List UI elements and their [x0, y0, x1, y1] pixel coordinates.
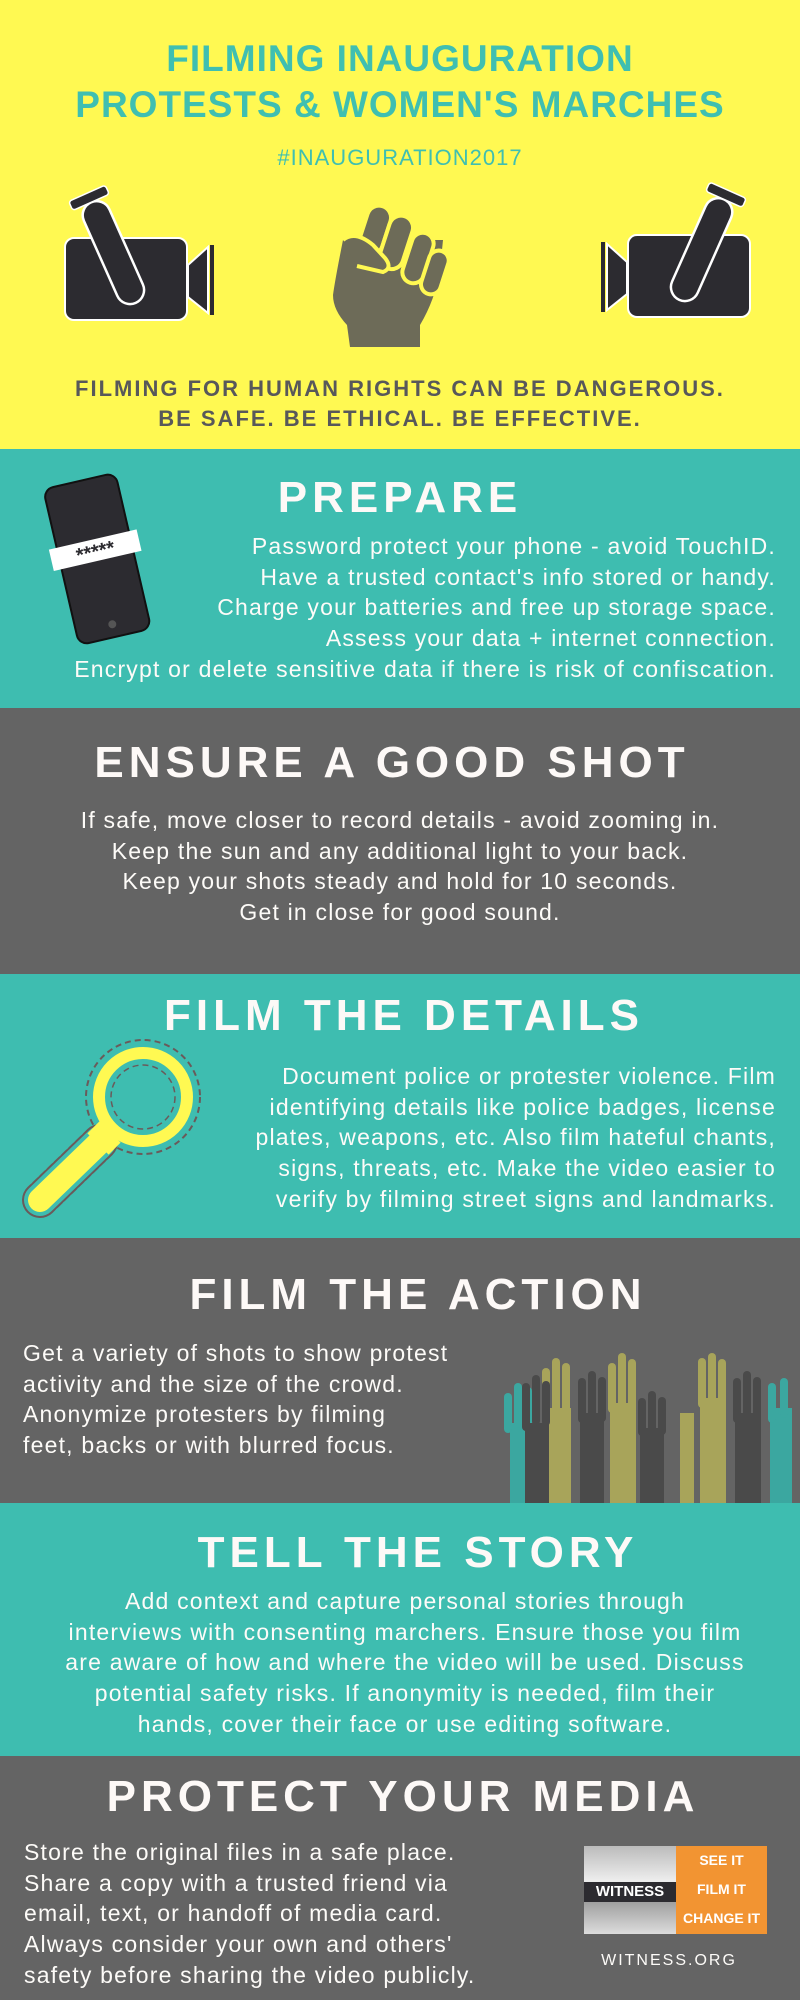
text: protect: Store the original files in a safe place.: [24, 1839, 455, 1865]
icon: raised hands: [504, 1353, 792, 1503]
panel: header: [0, 0, 800, 449]
text: action: Get a variety of shots to show protest: [23, 1340, 448, 1366]
title: FILMING INAUGURATION: [166, 38, 634, 79]
text: details: verify by filming street signs and landmarks.: [276, 1186, 776, 1212]
tagline: [75, 376, 725, 431]
text: story: interviews with consenting marchers. Ensure those you film: [69, 1619, 741, 1645]
title: PROTESTS & WOMEN'S MARCHES: [75, 84, 725, 125]
icon: raised fist: [333, 208, 447, 347]
text: ensure: [81, 807, 719, 925]
text: prepare: Charge your batteries and free up storage space.: [217, 594, 776, 620]
heading: details: FILM THE DETAILS: [164, 991, 644, 1040]
tagline: FILMING FOR HUMAN RIGHTS CAN BE DANGEROUS.: [75, 376, 725, 401]
panel: ensure a good shot: [0, 708, 800, 974]
text: details: signs, threats, etc. Make the video easier to: [278, 1155, 776, 1181]
text: prepare: Password protect your phone - avoid TouchID.: [252, 533, 776, 559]
url: WITNESS.ORG: [601, 1952, 737, 1969]
icon: phone: *****: [74, 537, 117, 567]
text: details: Document police or protester violence. Film: [282, 1063, 776, 1089]
icon: left camera: [64, 185, 214, 321]
text: protect: safety before sharing the video publicly.: [24, 1962, 476, 1988]
logo: witness: FILM IT: [697, 1881, 746, 1897]
text: action: feet, backs or with blurred focus.: [23, 1432, 395, 1458]
logo: witness: SEE IT: [699, 1852, 744, 1868]
text: protect: Always consider your own and others': [24, 1931, 453, 1957]
title: [75, 38, 725, 125]
text: ensure: Keep the sun and any additional light to your back.: [112, 838, 688, 864]
text: story: potential safety risks. If anonymity is needed, film their: [95, 1680, 715, 1706]
panel: protect your media: [0, 1756, 800, 2000]
heading: protect: PROTECT YOUR MEDIA: [107, 1772, 699, 1821]
text: details: plates, weapons, etc. Also film hateful chants,: [256, 1124, 776, 1150]
panel: film the details: [0, 974, 800, 1238]
hashtag: #INAUGURATION2017: [277, 145, 523, 170]
text: protect: Share a copy with a trusted friend via: [24, 1870, 448, 1896]
heading: prepare: PREPARE: [278, 473, 522, 522]
text: action: Anonymize protesters by filming: [23, 1401, 386, 1427]
logo: witness: WITNESS: [596, 1883, 664, 1900]
icon: phone: [44, 474, 150, 644]
icon: right camera: [601, 182, 751, 318]
text: story: Add context and capture personal stories through: [125, 1588, 685, 1614]
text: details: identifying details like police badges, license: [270, 1094, 776, 1120]
text: prepare: [74, 533, 776, 682]
icon: magnifier: [22, 1039, 201, 1218]
text: protect: [24, 1839, 476, 1988]
text: ensure: Keep your shots steady and hold for 10 seconds.: [122, 868, 678, 894]
logo: witness: [584, 1846, 767, 1934]
tagline: BE SAFE. BE ETHICAL. BE EFFECTIVE.: [158, 406, 642, 431]
heading: story: TELL THE STORY: [198, 1528, 638, 1577]
text: story: hands, cover their face or use editing software.: [138, 1711, 672, 1737]
text: prepare: Have a trusted contact's info stored or handy.: [260, 564, 776, 590]
panel: tell the story: [0, 1503, 800, 1756]
text: details: [256, 1063, 776, 1212]
panel: prepare: [0, 449, 800, 708]
text: prepare: Encrypt or delete sensitive data if there is risk of confiscation.: [74, 656, 776, 682]
text: story: are aware of how and where the video will be used. Discuss: [65, 1649, 745, 1675]
text: prepare: Assess your data + internet connection.: [326, 625, 776, 651]
text: action: [23, 1340, 448, 1458]
text: ensure: If safe, move closer to record details - avoid zooming in.: [81, 807, 719, 833]
text: ensure: Get in close for good sound.: [239, 899, 561, 925]
text: action: activity and the size of the crowd.: [23, 1371, 404, 1397]
text: story: [65, 1588, 745, 1737]
panel: film the action: [0, 1238, 800, 1503]
text: protect: email, text, or handoff of media card.: [24, 1900, 442, 1926]
heading: action: FILM THE ACTION: [189, 1270, 647, 1319]
heading: ensure: ENSURE A GOOD SHOT: [94, 738, 690, 787]
logo: witness: CHANGE IT: [683, 1910, 760, 1926]
